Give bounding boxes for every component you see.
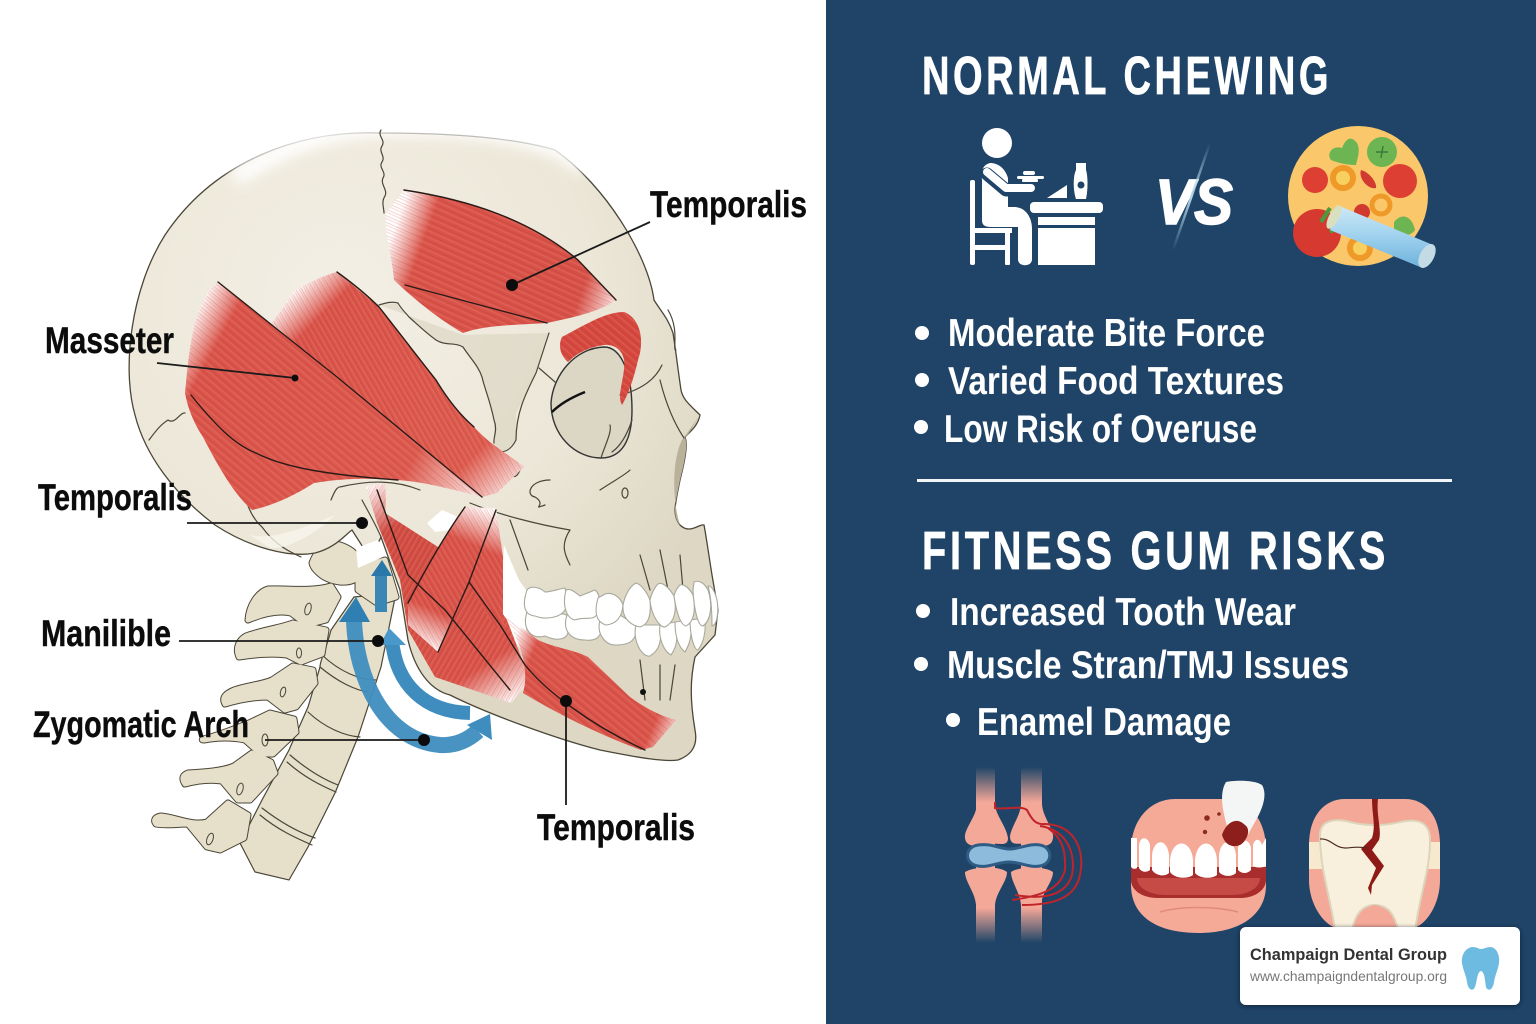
risks bullet list <box>914 591 1349 744</box>
temporal fossa shading <box>379 303 549 453</box>
heading: normal chewing: NORMAL CHEWING <box>922 46 1332 106</box>
label: Temporalis top: Temporalis <box>650 184 807 225</box>
icon: tooth <box>1462 947 1499 990</box>
label: Temporalis bottom: Temporalis <box>537 807 695 848</box>
white gaps <box>500 545 526 655</box>
icon: food plate with fitness gum <box>1288 126 1439 271</box>
arrow: inner curved <box>380 628 470 713</box>
label: Temporalis left: Temporalis <box>38 477 192 518</box>
panel: chewing comparison <box>826 0 1536 1024</box>
leader lines and dots <box>157 222 650 805</box>
label: Manilible: Manilible <box>41 613 171 654</box>
jaw crossing muscles <box>366 483 676 750</box>
normal chewing bullet list <box>914 312 1284 451</box>
icon: person eating at table <box>970 128 1103 265</box>
teeth <box>524 581 718 656</box>
masseter muscle group <box>185 272 524 510</box>
label: Zygomatic Arch: Zygomatic Arch <box>33 704 249 745</box>
text: increased tooth wear: Increased Tooth Wear <box>950 591 1296 634</box>
panel: skull anatomy <box>0 0 826 1024</box>
skull sutures and creases <box>380 130 386 213</box>
temporalis muscle upper <box>386 190 616 333</box>
skull <box>129 127 718 761</box>
text: muscle strain: Muscle Stran/TMJ Issues <box>947 644 1349 687</box>
label: Masseter: Masseter <box>45 320 174 361</box>
text: varied food textures: Varied Food Textures <box>948 360 1284 403</box>
cervical spine <box>155 543 396 880</box>
brow muscle <box>560 312 641 405</box>
icon: TMJ joint <box>965 767 1081 943</box>
mental foramen dot <box>640 689 646 695</box>
VS mark <box>1155 143 1233 250</box>
nasal shading <box>674 415 700 525</box>
text: website: www.champaigndentalgroup.org <box>1249 968 1447 984</box>
icon: cracked tooth <box>1309 799 1440 930</box>
text: low risk of overuse: Low Risk of Overuse <box>944 408 1257 451</box>
card: Champaign Dental Group <box>1240 927 1520 1005</box>
text: enamel damage: Enamel Damage <box>977 701 1231 744</box>
arrow: top straight <box>371 560 392 612</box>
text: practice name: Champaign Dental Group <box>1250 945 1447 964</box>
arrow: outer curved <box>339 597 492 745</box>
blue movement arrows <box>339 560 492 745</box>
eye orbit <box>551 347 632 458</box>
text: moderate bite force: Moderate Bite Force <box>948 312 1265 355</box>
icon: damaged gum and teeth <box>1131 781 1266 933</box>
VS mark: VS <box>1155 166 1233 238</box>
